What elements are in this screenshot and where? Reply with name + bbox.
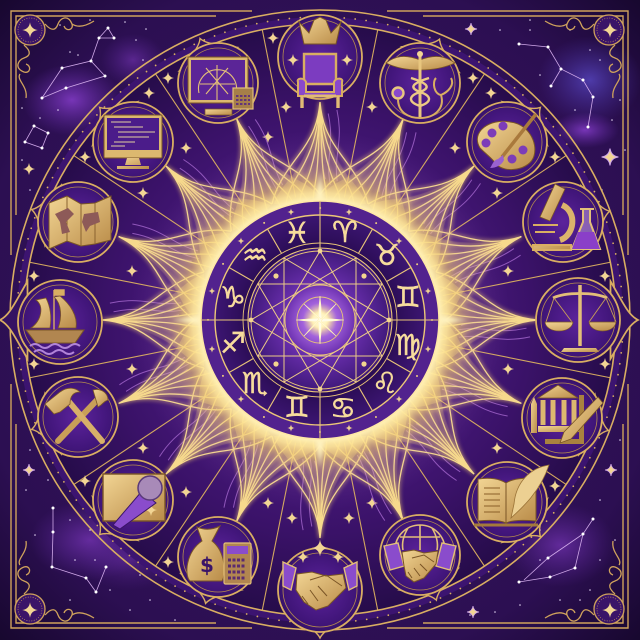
zodiac glyphs: ♊︎ [395, 280, 421, 314]
icon: folded map [24, 180, 118, 262]
icon: code monitor [77, 86, 173, 182]
zodiac glyphs: ♈︎ [332, 215, 358, 249]
sun rays glow [100, 100, 540, 540]
central star [296, 296, 344, 344]
icon: microscope and flask [523, 181, 617, 262]
dial core rings [243, 243, 397, 397]
crown [299, 17, 341, 44]
zodiac glyphs: ♋︎ [330, 391, 356, 425]
zodiac glyphs: ♊︎ [284, 390, 310, 424]
sun rays [100, 100, 540, 540]
dial base [199, 199, 441, 441]
sector stars [23, 32, 611, 568]
icon: scales of justice [536, 278, 638, 362]
dial inner disc [215, 215, 425, 425]
zodiac glyphs: ♉︎ [374, 238, 400, 272]
dial core [248, 248, 392, 392]
constellation: top left [25, 28, 114, 148]
icon: temple and drafting tools [522, 378, 616, 460]
icon: money bag and calculator: $ [200, 553, 214, 577]
zodiac glyphs: ♏︎ [242, 366, 268, 400]
zodiac glyphs [220, 215, 421, 425]
zodiac glyphs: ♒︎ [242, 238, 268, 272]
icon: throne and crown [278, 15, 362, 108]
zodiac dial [199, 199, 441, 441]
icon: caduceus and stethoscope [380, 27, 468, 123]
sun glow [130, 130, 510, 510]
icon: globe and handshake [380, 515, 466, 611]
zodiac glyphs: ♑︎ [220, 280, 246, 314]
constellation: top right [465, 23, 618, 165]
dial dividers [201, 201, 439, 439]
zodiac glyphs: ♌︎ [372, 366, 398, 400]
icon: handshake [278, 540, 362, 638]
sun flares [172, 172, 468, 468]
dial band dots [208, 208, 432, 432]
icon: sailing ship [0, 280, 102, 364]
icon: money bag and calculator [176, 517, 258, 611]
zodiac glyphs: ♍︎ [395, 328, 421, 362]
dial band marks [208, 208, 432, 432]
zodiac glyphs: ♓︎ [284, 216, 310, 250]
icon: palette and brush [467, 86, 563, 182]
faint wisps [107, 107, 533, 533]
icon: open book and quill [467, 462, 563, 558]
constellation: bottom right [467, 464, 617, 618]
icon: hammer and wrench [24, 377, 118, 459]
star nodes [249, 249, 391, 391]
icon: globe monitor and calculator [171, 27, 258, 123]
constellation: bottom left [23, 464, 106, 592]
star polygons [251, 251, 389, 389]
icon: microphone and screen [77, 460, 173, 556]
zodiac glyphs: ♐︎ [220, 326, 246, 360]
